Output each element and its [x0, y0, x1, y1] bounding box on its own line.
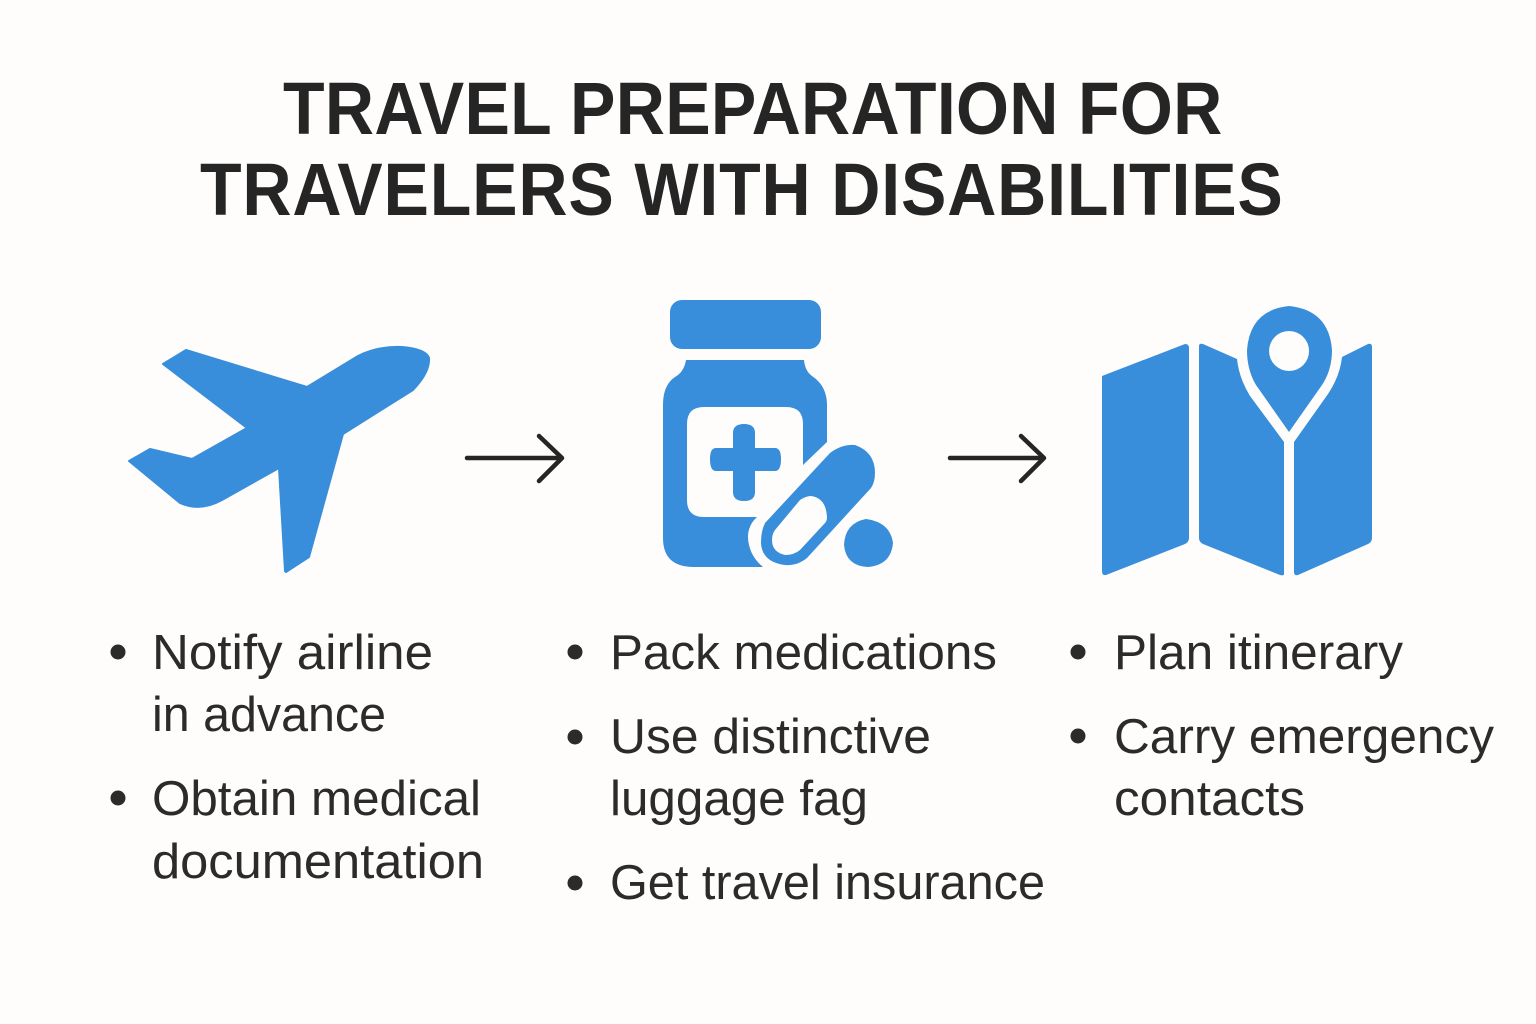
icon: folded map with pin: [1102, 306, 1372, 575]
title: TRAVEL PREPARATION FOR: [283, 68, 1222, 151]
arrow: plane to medication: [467, 436, 562, 481]
bullets column 3: contacts: [1114, 772, 1305, 826]
bullets column 1: Obtain medical: [152, 772, 481, 826]
arrow: medication to map: [950, 436, 1044, 481]
bullets column 3: Plan itinerary: [1114, 626, 1403, 680]
bullets column 2: Get travel insurance: [610, 856, 1045, 910]
icon: medicine bottle with pill: [663, 300, 893, 567]
bullets column 2: [568, 626, 1045, 910]
bullets column 2: Use distinctive: [610, 710, 931, 764]
bullets column 1: [110, 626, 484, 889]
map pin: [1247, 306, 1332, 432]
small round pill: [844, 519, 893, 567]
bullets column 1: documentation: [152, 835, 484, 889]
icon: airplane: [129, 347, 429, 572]
bullets column 1: in advance: [152, 688, 386, 742]
title: TRAVELERS WITH DISABILITIES: [200, 149, 1283, 232]
bottle cap: [670, 300, 821, 349]
title: [200, 68, 1283, 232]
bullets column 2: luggage fag: [610, 772, 868, 826]
bullets column 2: Pack medications: [610, 626, 997, 680]
bullets column 3: Carry emergency: [1114, 710, 1495, 764]
bottle body: [663, 360, 827, 567]
medical cross: [710, 424, 781, 501]
capsule: [761, 445, 875, 565]
bullets column 3: [1070, 626, 1495, 826]
capsule highlight: [772, 496, 827, 555]
bullets column 1: Notify airline: [152, 626, 433, 680]
